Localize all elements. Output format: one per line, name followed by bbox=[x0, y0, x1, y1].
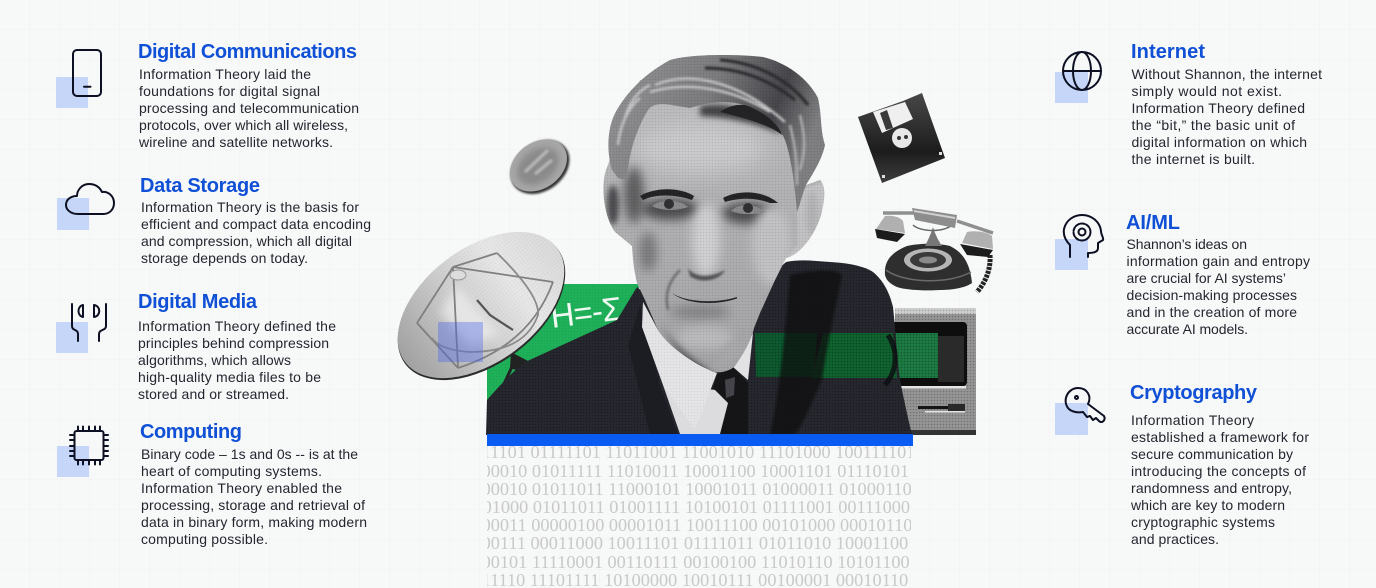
text: internet bbox=[1132, 66, 1322, 167]
heading: cryptography: Cryptography bbox=[1130, 382, 1258, 404]
text: data storage: and compression, which all digital bbox=[141, 233, 352, 249]
text: data storage: Information Theory is the basis for bbox=[141, 199, 359, 215]
icon: cloud bbox=[57, 184, 114, 230]
text: AI/ML: Shannon’s ideas on bbox=[1126, 236, 1247, 252]
binary code block: 00000010 01011011 11000101 10001011 01000011 01000110 bbox=[454, 479, 912, 499]
text: cryptography: secure communication by bbox=[1131, 446, 1293, 462]
text: internet: the internet is built. bbox=[1132, 151, 1255, 167]
text: computing: heart of computing systems. bbox=[141, 463, 322, 479]
text: digital media: principles behind compression bbox=[138, 335, 329, 351]
telephone illustration bbox=[875, 208, 993, 292]
heading: internet: Internet bbox=[1131, 41, 1205, 63]
icon: earbuds bbox=[56, 304, 106, 353]
text: cryptography bbox=[1130, 412, 1309, 547]
text: AI/ML: and in the creation of more bbox=[1126, 304, 1297, 320]
panel: cryptography bbox=[1055, 382, 1309, 547]
text: cryptography: cryptographic systems bbox=[1131, 514, 1275, 530]
blue overlay square bbox=[438, 322, 483, 362]
icon: head with gear bbox=[1055, 215, 1103, 270]
text: digital media: algorithms, which allows bbox=[138, 352, 291, 368]
panel: computing bbox=[57, 421, 367, 547]
binary code block: 00000011 00000100 00001011 10011100 00101000 00010110 bbox=[454, 515, 912, 535]
text: AI/ML: are crucial for AI systems’ bbox=[1126, 270, 1286, 286]
text: AI/ML: information gain and entropy bbox=[1126, 253, 1310, 269]
heading: digital communications: Digital Communications bbox=[138, 41, 357, 63]
text: cryptography: which are key to modern bbox=[1130, 497, 1285, 513]
floppy disk illustration bbox=[858, 93, 945, 183]
binary code block: 00001000 01011011 01001111 10100101 01111001 00111000 bbox=[455, 497, 910, 517]
text: digital communications: protocols, over which all wireless, bbox=[139, 117, 348, 133]
binary code block: 00000101 11110001 00110111 00100100 11010110 10101100 bbox=[454, 552, 910, 572]
text: data storage bbox=[141, 199, 371, 266]
icon: microchip bbox=[57, 426, 108, 477]
icon: smartphone bbox=[56, 50, 101, 108]
hair bbox=[608, 55, 825, 212]
shirt and collar bbox=[642, 302, 753, 434]
text: digital media: Information Theory defined the bbox=[138, 318, 336, 334]
blue bar bbox=[487, 434, 913, 446]
text: digital communications: Information Theory laid the bbox=[139, 66, 311, 82]
text: cryptography: Information Theory bbox=[1131, 412, 1254, 428]
text: AI/ML: accurate AI models. bbox=[1126, 321, 1248, 337]
heading: AI/ML: AI/ML bbox=[1126, 212, 1180, 234]
text: computing bbox=[141, 446, 367, 547]
text: computing: Binary code – 1s and 0s -- is at the bbox=[141, 446, 358, 462]
suit green band bbox=[755, 333, 897, 378]
green rectangle with formula bbox=[487, 284, 639, 409]
heading: computing: Computing bbox=[140, 421, 242, 443]
heading: data storage: Data Storage bbox=[140, 175, 260, 197]
text: data storage: efficient and compact data encoding bbox=[141, 216, 371, 232]
panel: data storage bbox=[57, 175, 371, 266]
text: internet: Without Shannon, the internet bbox=[1132, 66, 1322, 82]
text: internet: Information Theory defined bbox=[1132, 100, 1305, 116]
text: AI/ML bbox=[1126, 236, 1310, 337]
monitor illustration bbox=[890, 308, 976, 435]
text: cryptography: introducing the concepts of bbox=[1131, 463, 1306, 479]
text: computing: computing possible. bbox=[141, 531, 268, 547]
binary code block bbox=[487, 446, 911, 586]
binary code block: 00000010 01011111 11010011 10001100 10001101 01110101 bbox=[454, 461, 909, 481]
icon: globe bbox=[1055, 52, 1101, 103]
panel: AI/ML bbox=[1055, 212, 1310, 337]
face bbox=[603, 80, 830, 375]
panel: internet bbox=[1055, 41, 1322, 167]
text: digital communications: wireline and satellite networks. bbox=[138, 134, 333, 150]
text: digital media bbox=[138, 318, 336, 402]
text: digital media: high-quality media files to be bbox=[138, 369, 321, 385]
panel: digital communications bbox=[56, 41, 359, 150]
nose and mouth bbox=[672, 268, 737, 303]
eyes and brows bbox=[640, 189, 778, 214]
text: internet: simply would not exist. bbox=[1132, 83, 1282, 99]
binary code block: 00000111 00011000 10011101 01111011 01011010 10001100 bbox=[454, 533, 908, 553]
text: cryptography: and practices. bbox=[1131, 531, 1219, 547]
text: computing: Information Theory enabled the bbox=[141, 480, 342, 496]
icon: key bbox=[1055, 388, 1105, 435]
text: digital media: stored and or streamed. bbox=[138, 386, 289, 402]
suit folds bbox=[770, 270, 895, 435]
panel: digital media bbox=[56, 291, 336, 402]
text: internet: digital information on which bbox=[1132, 134, 1307, 150]
satellite dish illustration bbox=[371, 202, 592, 410]
text: internet: the “bit,” the basic unit of bbox=[1132, 117, 1295, 133]
text: cryptography: randomness and entropy, bbox=[1131, 480, 1292, 496]
heading: digital media: Digital Media bbox=[138, 291, 258, 313]
text: cryptography: established a framework for bbox=[1131, 429, 1309, 445]
text: data storage: storage depends on today. bbox=[141, 250, 308, 266]
text: AI/ML: decision-making processes bbox=[1126, 287, 1297, 303]
binary code block: 01011101 01111101 11011001 11001010 11101000 100111101 bbox=[454, 442, 915, 462]
text: computing: processing, storage and retrieval of bbox=[141, 497, 365, 513]
portrait: Claude Shannon bbox=[486, 55, 912, 435]
suit jacket bbox=[486, 260, 912, 435]
text: digital communications: foundations for digital signal bbox=[139, 83, 320, 99]
text: digital communications: processing and telecommunication bbox=[139, 100, 359, 116]
text: computing: data in binary form, making modern bbox=[141, 514, 367, 530]
text: digital communications bbox=[138, 66, 359, 150]
coin illustration bbox=[500, 129, 580, 205]
formula: H=-Σ bbox=[548, 289, 624, 335]
